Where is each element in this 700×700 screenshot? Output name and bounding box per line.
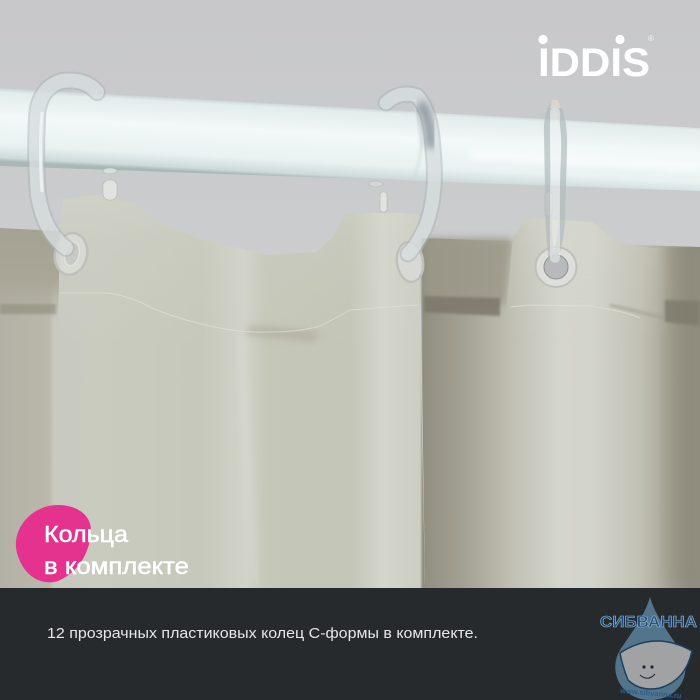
curtain hooks <box>103 168 552 216</box>
back curtain left <box>0 228 62 588</box>
tub face <box>640 665 655 678</box>
bathtub <box>620 641 692 689</box>
footer band <box>0 588 700 700</box>
description text: 12 прозрачных пластиковых колец С-формы в комплекте. <box>47 626 478 642</box>
hem stitching <box>60 293 640 332</box>
back fold shadow centre <box>425 238 512 305</box>
front curtain panel one <box>40 190 430 590</box>
shower curtain <box>0 190 700 590</box>
watermark url: www.sibvanna.ru <box>619 686 682 700</box>
ring left <box>36 80 97 278</box>
brand logo: IDDIS <box>538 41 650 85</box>
back curtain centre and right <box>420 238 700 588</box>
badge heading: Кольца <box>44 521 128 547</box>
watermark name: СИБВАННА <box>600 614 697 631</box>
water drop <box>615 597 685 700</box>
back curtain left shadow <box>0 228 60 320</box>
pink blob <box>16 505 91 582</box>
grommet <box>536 247 576 287</box>
badge <box>16 505 189 582</box>
ring centre <box>386 94 434 284</box>
front curtain panel three <box>507 218 700 576</box>
shower rod <box>0 88 700 191</box>
brand logo: ® <box>648 34 654 43</box>
ring right <box>536 100 576 287</box>
badge heading: в комплекте <box>44 553 189 579</box>
watermark: sibvanna logo <box>600 597 697 700</box>
back hem band left <box>0 304 56 314</box>
back hem band centre <box>424 296 500 316</box>
